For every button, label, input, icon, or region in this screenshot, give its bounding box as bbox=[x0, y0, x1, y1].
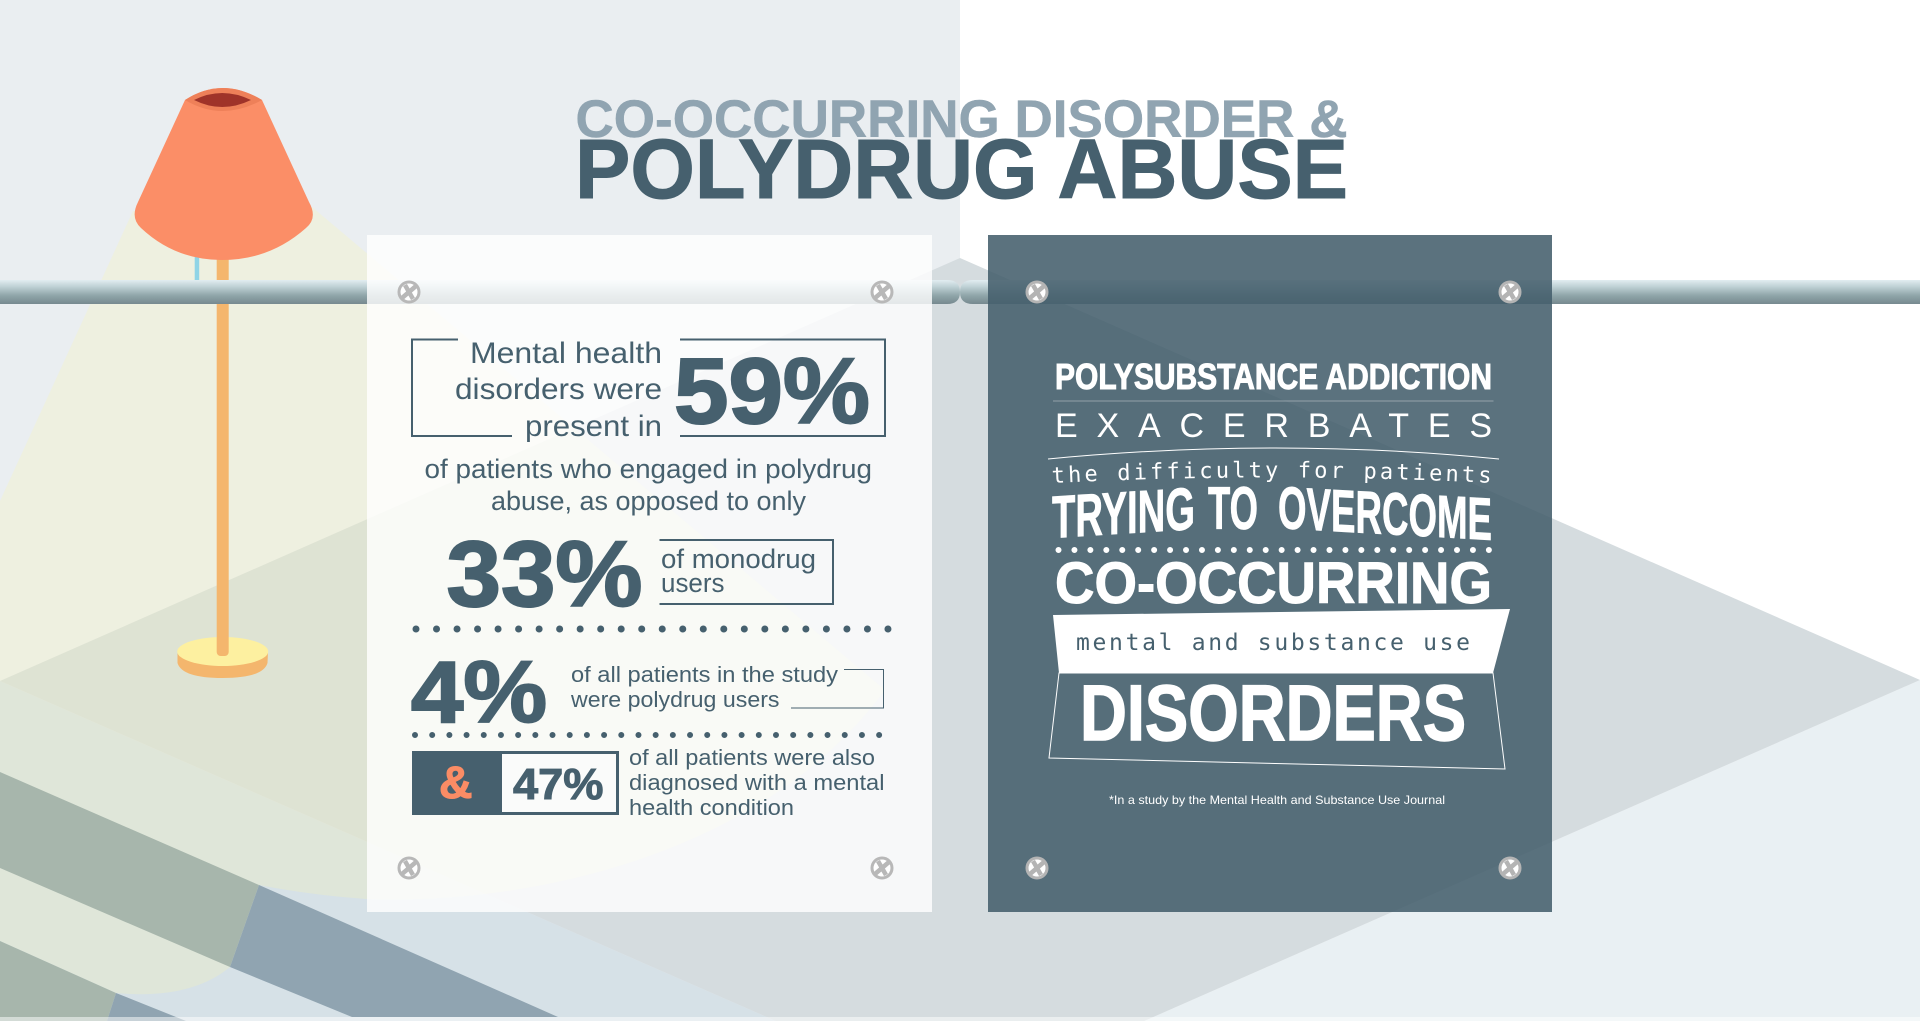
words: trying to overcome: TRYING bbox=[1052, 475, 1195, 551]
floor stripes bbox=[0, 772, 1920, 1021]
icon: screw top right bbox=[1500, 282, 1520, 302]
title line 1: CO-OCCURRING DISORDER & bbox=[576, 90, 1348, 149]
text: mental health disorders: present in bbox=[525, 410, 662, 443]
lamp shade bbox=[135, 88, 313, 260]
heading: polysubstance addiction: POLYSUBSTANCE ADDICTION bbox=[1055, 356, 1492, 397]
number: 33%: 33% bbox=[446, 522, 642, 626]
icon: screw bottom left bbox=[1027, 858, 1047, 878]
icon: screw bottom right bbox=[872, 858, 892, 878]
footnote: *In a study by the Mental Health and Substance Use Journal bbox=[1109, 793, 1445, 807]
stat: 33% of monodrug users bbox=[446, 522, 833, 626]
word: co-occurring: CO-OCCURRING bbox=[1055, 551, 1492, 616]
badge: & 47% bbox=[412, 751, 619, 815]
badge: & 47%: & bbox=[439, 757, 472, 808]
stat: 33% of monodrug users: of monodrug bbox=[661, 544, 816, 574]
ribbon: mental and substance use: mental and substance use bbox=[1076, 630, 1470, 656]
text: of patients who engaged bbox=[424, 454, 872, 516]
stat: 59% with bracket frame bbox=[412, 337, 885, 443]
words: trying to overcome: OVERCOME bbox=[1278, 474, 1492, 553]
outlined block: disorders: DISORDERS bbox=[1080, 668, 1466, 757]
text: of patients who engaged: of patients who engaged in polydrug bbox=[424, 454, 872, 484]
word: exacerbates: EXACERBATES bbox=[1055, 407, 1492, 445]
text: of patients who engaged: abuse, as opposed to only bbox=[491, 486, 806, 516]
title bbox=[575, 90, 1348, 216]
icon: screw top left bbox=[1027, 282, 1047, 302]
icon: screw bottom right bbox=[1500, 858, 1520, 878]
icon: screw top right bbox=[872, 282, 892, 302]
words: trying to overcome bbox=[1052, 474, 1492, 553]
number: 59%: 59% bbox=[674, 339, 870, 443]
icon: screw top left bbox=[399, 282, 419, 302]
badge: & 47%: 47% bbox=[513, 760, 604, 809]
title line 2: POLYDRUG ABUSE bbox=[575, 122, 1348, 216]
text: mental health disorders bbox=[455, 337, 662, 443]
ribbon: mental and substance use bbox=[1053, 609, 1510, 673]
lamp cord bbox=[195, 256, 199, 282]
text: the difficulty for patients: the difficulty for patients bbox=[1052, 460, 1490, 483]
lamp base bbox=[177, 637, 268, 678]
number: 4%: 4% bbox=[411, 644, 547, 741]
stat: 4% polydrug users: of all patients in the study bbox=[571, 662, 838, 687]
stat: & 47% mental health condition: of all patients were also bbox=[629, 745, 875, 770]
stat: & 47% mental health condition: diagnosed with a mental bbox=[629, 770, 884, 795]
text: mental health disorders: Mental health bbox=[470, 337, 662, 370]
wall pipe bbox=[0, 280, 1920, 304]
panel: statistics bbox=[367, 235, 932, 912]
words: trying to overcome: TO bbox=[1208, 475, 1258, 542]
icon: screw bottom left bbox=[399, 858, 419, 878]
stat: 33% of monodrug users: users bbox=[661, 568, 724, 598]
floor lamp bbox=[135, 88, 313, 678]
stat: & 47% mental health condition: health condition bbox=[629, 795, 794, 820]
text: mental health disorders: disorders were bbox=[455, 373, 662, 406]
panel: polysubstance addiction statement bbox=[988, 235, 1552, 912]
lamp pole bbox=[217, 250, 229, 656]
stat: 4% polydrug users bbox=[411, 644, 884, 741]
lamp light cone bbox=[0, 207, 885, 994]
stat: & 47% mental health condition bbox=[412, 745, 884, 820]
stat: 4% polydrug users: were polydrug users bbox=[570, 687, 780, 712]
